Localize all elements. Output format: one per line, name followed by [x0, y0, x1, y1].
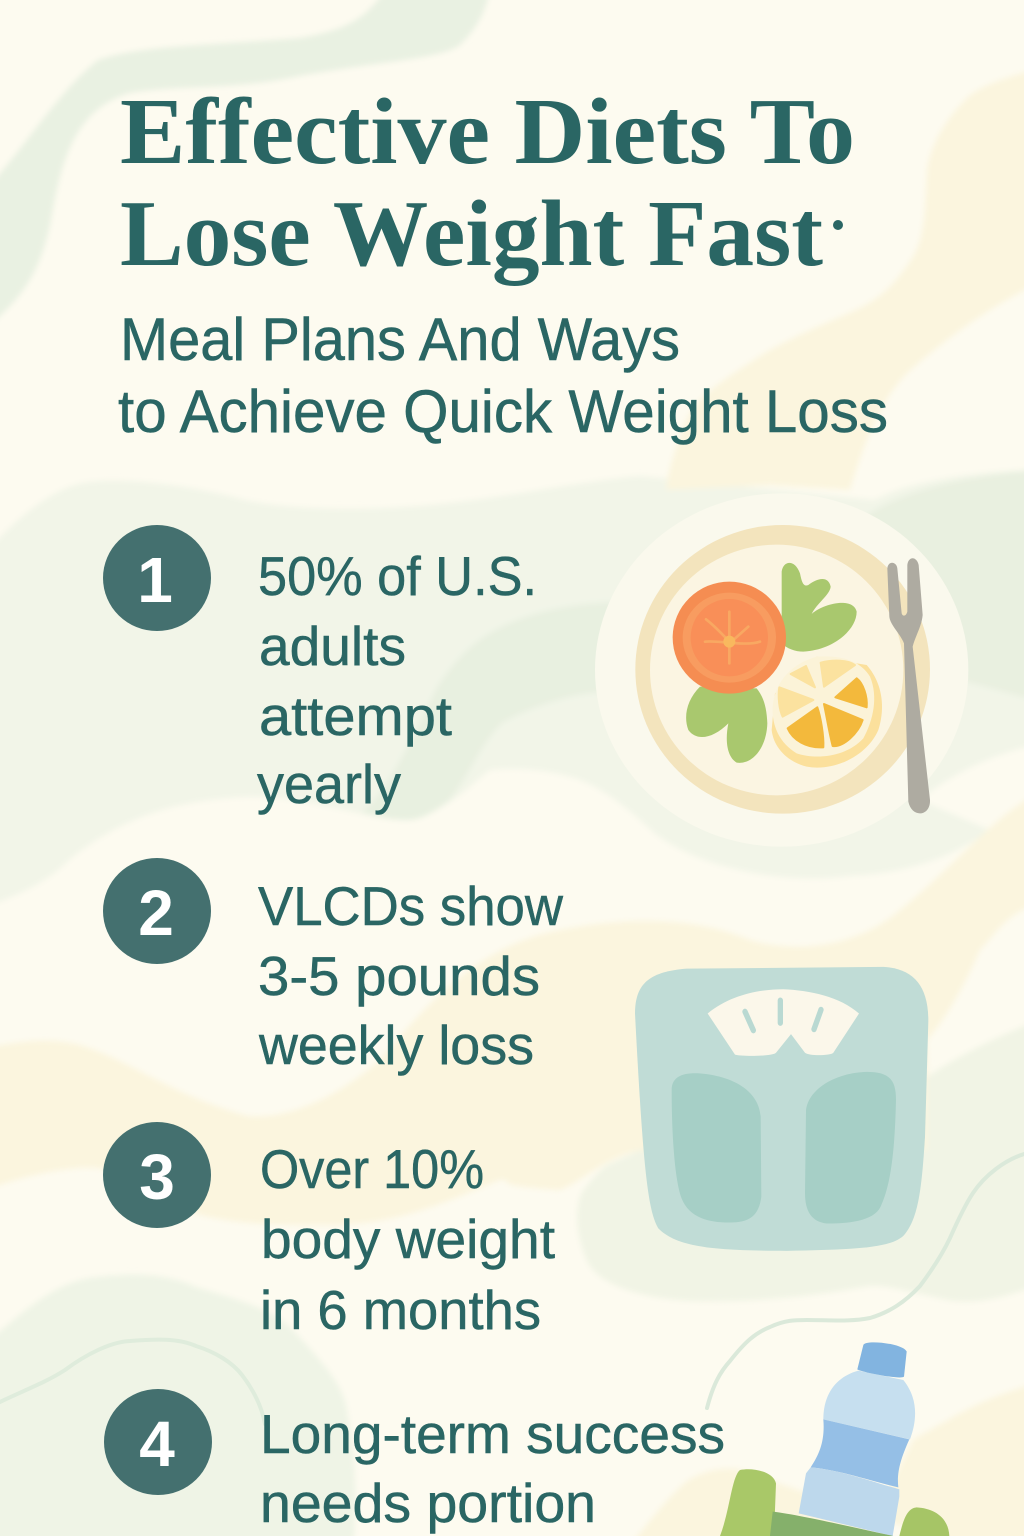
left foot pad: [672, 1073, 761, 1223]
title: Effective Diets To: [120, 80, 855, 184]
number badge 4: [104, 1389, 212, 1495]
title: [120, 80, 855, 286]
statement 3: Over 10%: [260, 1138, 484, 1200]
leaf: top: [782, 563, 857, 652]
list item 1: [103, 525, 537, 815]
list item 4: [104, 1389, 725, 1534]
statement 4: Long-term success: [260, 1403, 725, 1465]
dumbbell: [720, 1469, 949, 1536]
number badge 3: [103, 1122, 211, 1228]
number badge 1: 1: [137, 544, 173, 616]
subtitle: [118, 306, 888, 445]
statement 1: attempt: [259, 685, 452, 747]
water bottle: [799, 1342, 915, 1536]
number badge 2: 2: [138, 877, 174, 949]
number badge 4: 4: [139, 1408, 175, 1480]
fork: [887, 558, 930, 813]
number badge 2: [103, 858, 211, 964]
list item 3: [103, 1122, 555, 1341]
title: Lose Weight Fast: [120, 182, 823, 286]
lemon slice: [772, 656, 882, 768]
subtitle: Meal Plans And Ways: [120, 306, 680, 373]
tomato slice: [673, 582, 786, 694]
icon: bathroom scale: [635, 967, 928, 1251]
scale body: [635, 967, 928, 1251]
statement 4: needs portion: [260, 1472, 596, 1534]
statement 3: body weight: [261, 1208, 555, 1270]
leaf: bottom: [686, 687, 767, 763]
list item 2: [103, 858, 563, 1076]
statement 3: [260, 1138, 555, 1341]
number badge 3: 3: [139, 1141, 175, 1213]
icon: water bottle and dumbbell: [720, 1342, 949, 1536]
scale dial: [708, 989, 859, 1056]
right foot pad: [805, 1072, 896, 1224]
statement 2: 3-5 pounds: [258, 945, 540, 1007]
icon: plate of food with fork: [595, 493, 968, 847]
statement 1: 50% of U.S.: [258, 545, 537, 607]
statement 2: [258, 875, 563, 1076]
statement 2: VLCDs show: [258, 875, 563, 937]
statement 1: adults: [259, 615, 406, 677]
subtitle: to Achieve Quick Weight Loss: [118, 378, 888, 445]
statement 4: [260, 1403, 725, 1534]
statement 1: [257, 545, 537, 815]
number badge 1: [103, 525, 211, 631]
dumbbell bar: [770, 1512, 893, 1536]
statement 2: weekly loss: [258, 1014, 534, 1076]
statement 3: in 6 months: [260, 1279, 541, 1341]
plate halo: [595, 493, 968, 847]
statement 1: yearly: [257, 753, 401, 815]
plate: [635, 525, 930, 814]
